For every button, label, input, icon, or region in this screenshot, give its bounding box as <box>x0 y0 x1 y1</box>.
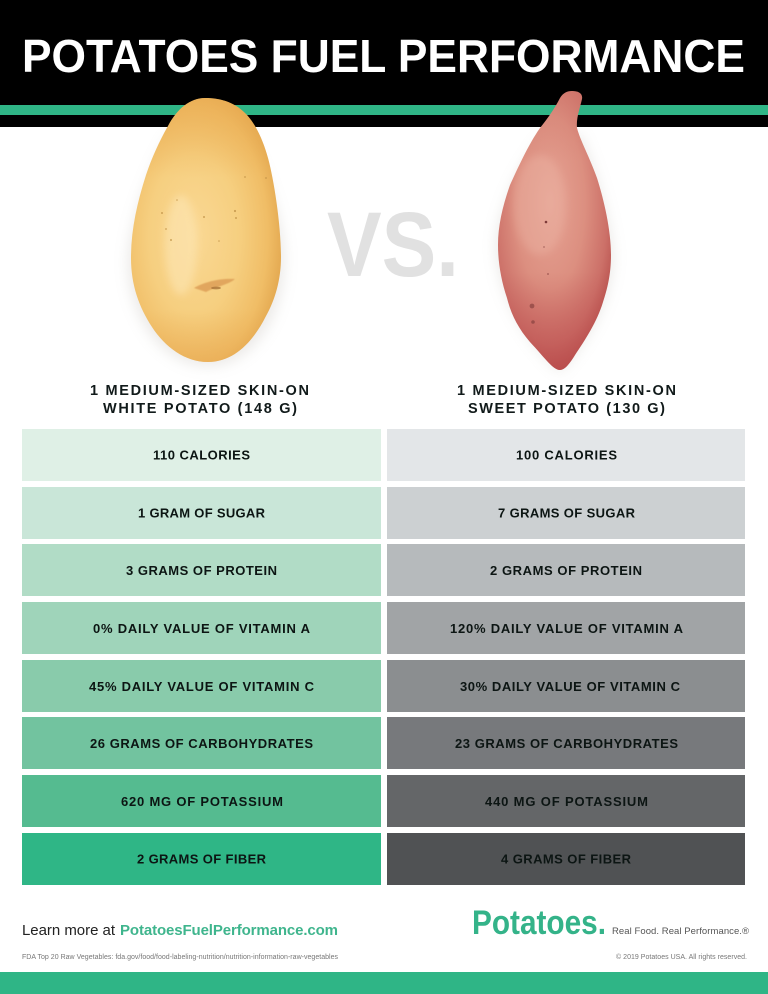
row: vitamin C <box>387 660 745 712</box>
heading: white potato <box>90 383 309 417</box>
row: fiber: 4 GRAMS OF FIBER <box>501 852 632 866</box>
row: vitamin A <box>387 602 745 654</box>
row: carbohydrates <box>22 717 381 769</box>
vs label: VS. <box>327 194 459 296</box>
footer band <box>0 972 768 994</box>
heading: sweet potato <box>457 383 676 417</box>
row: protein <box>387 544 745 596</box>
panel: sweet potato nutrition <box>387 429 745 885</box>
icon: white potato <box>128 98 284 366</box>
row: calories: 110 CALORIES <box>153 448 250 462</box>
row: carbohydrates: 26 GRAMS OF CARBOHYDRATES <box>90 736 313 751</box>
row: protein: 2 GRAMS OF PROTEIN <box>490 563 642 578</box>
title: POTATOES FUEL PERFORMANCE <box>22 30 745 82</box>
logo: Potatoes: Potatoes. <box>472 904 606 942</box>
row: vitamin C: 30% DAILY VALUE OF VITAMIN C <box>460 679 681 694</box>
row: vitamin A: 120% DAILY VALUE OF VITAMIN A <box>450 621 684 636</box>
row: vitamin A: 0% DAILY VALUE OF VITAMIN A <box>93 621 311 636</box>
row: sugar: 7 GRAMS OF SUGAR <box>498 506 636 520</box>
row: protein: 3 GRAMS OF PROTEIN <box>126 563 277 578</box>
learn more link: Learn more at <box>22 922 116 939</box>
copyright: © 2019 Potatoes USA. All rights reserved. <box>616 953 747 961</box>
row: sugar <box>387 487 745 539</box>
row: calories <box>22 429 381 481</box>
row: fiber <box>22 833 381 885</box>
heading: white potato: WHITE POTATO (148 G) <box>103 401 297 417</box>
row: potassium <box>22 775 381 827</box>
row: fiber <box>387 833 745 885</box>
row: potassium: 620 MG OF POTASSIUM <box>121 794 283 809</box>
heading: sweet potato: 1 MEDIUM-SIZED SKIN-ON <box>457 383 676 399</box>
row: calories <box>387 429 745 481</box>
row: potassium <box>387 775 745 827</box>
tagline: Real Food. Real Performance.® <box>612 926 749 937</box>
row: vitamin A <box>22 602 381 654</box>
header band <box>0 0 768 127</box>
row: carbohydrates <box>387 717 745 769</box>
heading: white potato: 1 MEDIUM-SIZED SKIN-ON <box>90 383 309 399</box>
row: carbohydrates: 23 GRAMS OF CARBOHYDRATES <box>455 736 678 751</box>
heading: sweet potato: SWEET POTATO (130 G) <box>468 401 665 417</box>
row: vitamin C <box>22 660 381 712</box>
row: potassium: 440 MG OF POTASSIUM <box>485 794 648 809</box>
panel: white potato nutrition <box>22 429 381 885</box>
icon: sweet potato <box>496 91 613 372</box>
row: protein <box>22 544 381 596</box>
row: calories: 100 CALORIES <box>516 448 617 462</box>
row: sugar: 1 GRAM OF SUGAR <box>138 506 266 520</box>
row: fiber: 2 GRAMS OF FIBER <box>137 852 267 866</box>
learn more link: PotatoesFuelPerformance.com <box>120 922 338 939</box>
source note: FDA Top 20 Raw Vegetables: fda.gov/food/food-labeling-nutrition/nutrition-information-raw-vegetables <box>22 954 338 961</box>
row: sugar <box>22 487 381 539</box>
row: vitamin C: 45% DAILY VALUE OF VITAMIN C <box>89 679 315 694</box>
learn more link <box>22 922 338 939</box>
